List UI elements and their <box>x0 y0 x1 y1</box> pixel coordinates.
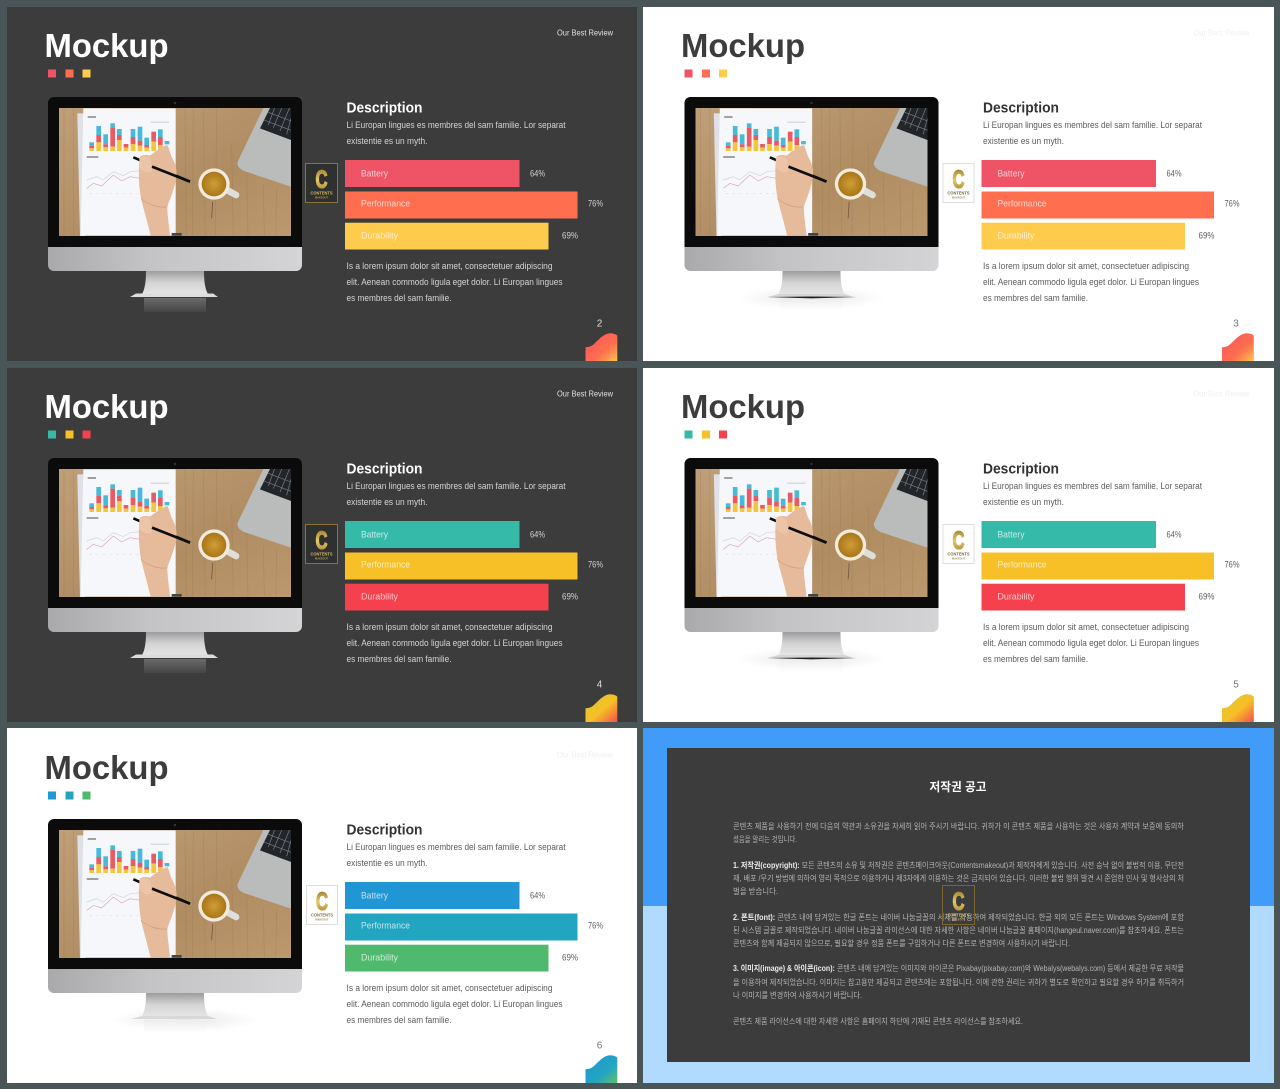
bar chart: 76% <box>588 560 603 570</box>
logo <box>306 524 338 564</box>
panel: copyright notice <box>643 728 1274 1083</box>
notice section: copyright: 재, 배포 /무기 방법에 의하여 영리 목적으로 이용하거나 제3자에게 이용하는 것은 금지되어 있습니다. 이러한 불법 행위 발견 시 준엄한 민사 및 형사상의 처 <box>733 873 1184 883</box>
bar chart: Durability <box>998 591 1035 601</box>
bar chart: 76% <box>1224 560 1240 570</box>
logo: MAKEOUT <box>952 196 965 200</box>
bar chart: Durability <box>998 230 1035 240</box>
logo <box>306 886 338 924</box>
bar chart: 69% <box>562 230 578 240</box>
body text <box>983 622 1199 664</box>
slide 3: light warm <box>643 7 1274 361</box>
intro text: Li Europan lingues es membres del sam familie. Lor separat <box>346 481 566 491</box>
intro text <box>346 120 566 146</box>
body text: es membres del sam familie. <box>346 293 452 303</box>
intro text: existentie es un myth. <box>983 136 1064 146</box>
logo: CONTENTS <box>948 552 970 556</box>
body text <box>346 261 563 303</box>
logo: CONTENTS <box>310 190 332 196</box>
slide 4: dark sun <box>7 368 637 722</box>
bar chart <box>345 882 603 972</box>
logo: MAKEOUT <box>316 918 329 922</box>
body text: es membres del sam familie. <box>346 1015 452 1025</box>
description heading: Description <box>983 462 1059 478</box>
logo: MAKEOUT <box>315 556 328 560</box>
corner shape <box>1222 694 1254 722</box>
page number: 6 <box>597 1040 603 1052</box>
page number: 2 <box>597 318 603 330</box>
body text: es membres del sam familie. <box>983 293 1088 303</box>
bar chart <box>982 521 1240 610</box>
corner shape <box>586 1055 617 1083</box>
notice section: copyright: 1. 저작권(copyright): 모든 콘텐츠의 소유 및 저작권은 콘텐츠메이크아웃(Contentsmakeout)과 제작자에게 있습니다. 사전 승낙 없이 불법적 이용, 무단전 <box>733 860 1184 870</box>
slide background <box>643 368 1274 722</box>
notice section: copyright <box>733 860 1184 896</box>
slide background <box>7 368 637 722</box>
intro text <box>983 481 1202 507</box>
corner shape <box>586 694 617 722</box>
bar chart: Durability <box>361 952 398 962</box>
title: Mockup <box>681 388 805 425</box>
logo: C <box>316 166 328 194</box>
notice intro <box>733 821 1185 844</box>
logo: MAKEOUT <box>952 556 965 560</box>
monitor mockup <box>48 458 302 673</box>
logo: CONTENTS <box>310 552 332 556</box>
logo: C <box>952 166 964 194</box>
header note: Our Best Review <box>1194 28 1250 38</box>
logo: C <box>952 527 964 555</box>
bar chart: Performance <box>998 199 1046 209</box>
title: Mockup <box>44 388 168 425</box>
logo <box>306 164 338 202</box>
notice section: font: 된 시스템 글꼴로 제작되었습니다. 네이버 나눔글꼴 라이선스에 대한 자세한 사항은 네이버 나눔글꼴 홈페이지(hangeul.naver.com)를 참조하세요. 폰트는 <box>733 925 1184 935</box>
notice footer: 콘텐츠 제품 라이선스에 대한 자세한 사항은 홈페이지 하단에 기재된 콘텐츠 라이선스를 참조하세요. <box>733 1016 1023 1026</box>
body text: es membres del sam familie. <box>983 654 1088 664</box>
bar chart: Durability <box>361 591 398 601</box>
monitor mockup <box>48 819 302 1033</box>
slide background <box>643 7 1274 361</box>
logo: C <box>316 888 328 916</box>
page number: 3 <box>1233 318 1239 330</box>
body text: elit. Aenean commodo ligula eget dolor. Li Europan lingues <box>346 638 563 648</box>
logo <box>943 164 974 202</box>
title accent squares <box>48 792 90 800</box>
logo: MAKEOUT <box>315 196 328 200</box>
bar chart: Performance <box>361 199 410 209</box>
title: Mockup <box>44 27 168 64</box>
page number: 4 <box>597 680 603 690</box>
logo: CONTENTS <box>948 912 970 918</box>
description heading: Description <box>346 822 422 838</box>
intro text <box>346 481 566 507</box>
bar chart: 69% <box>1198 591 1214 601</box>
body text <box>983 261 1199 303</box>
intro text: existentie es un myth. <box>346 497 428 507</box>
title accent squares <box>48 70 90 78</box>
bar chart: Performance <box>361 921 410 931</box>
slide 2: dark warm <box>7 7 637 361</box>
slide background <box>7 7 637 361</box>
bar chart: Performance <box>998 560 1046 570</box>
bar chart <box>982 160 1240 250</box>
notice section: images and icons <box>733 963 1184 1000</box>
notice title: 저작권 공고 <box>930 779 986 794</box>
corner shape <box>586 333 617 361</box>
intro text: Li Europan lingues es membres del sam familie. Lor separat <box>346 120 566 130</box>
body text: Is a lorem ipsum dolor sit amet, consectetuer adipiscing <box>983 622 1189 632</box>
intro text: existentie es un myth. <box>346 136 428 146</box>
bar chart: 76% <box>588 921 603 931</box>
body text: elit. Aenean commodo ligula eget dolor. Li Europan lingues <box>346 277 563 287</box>
logo: C <box>952 888 964 916</box>
bar chart: 69% <box>562 952 578 962</box>
logo: CONTENTS <box>948 190 970 196</box>
logo: C <box>316 527 328 555</box>
intro text <box>983 120 1202 146</box>
header note: Our Best Review <box>1194 390 1250 398</box>
body text: es membres del sam familie. <box>346 654 452 664</box>
bar chart: 76% <box>588 199 603 209</box>
body text: Is a lorem ipsum dolor sit amet, consectetuer adipiscing <box>346 261 552 271</box>
logo: MAKEOUT <box>952 918 965 922</box>
notice section: images and icons: 을 이용하여 제작되었습니다. 이미지는 참고용만 제공되고 콘텐츠에는 포함됩니다. 이에 관한 권리는 귀하가 별도로 확인하고 필요할 경우 허가를 취득하거 <box>733 977 1184 987</box>
bar chart: 64% <box>530 890 545 900</box>
intro text: existentie es un myth. <box>346 858 428 868</box>
notice section: font: 2. 폰트(font): 콘텐츠 내에 담겨있는 한글 폰트는 네이버 나눔글꼴의 서체를 사용하여 제작되었습니다. 한글 외의 모든 폰트는 Windows System에 포함 <box>733 912 1185 922</box>
notice dark card <box>667 748 1250 1062</box>
description heading: Description <box>346 462 422 478</box>
notice section: copyright: 벌을 받습니다. <box>733 886 778 896</box>
notice section: images and icons: 나 이미지를 변경하여 사용하시기 바랍니다. <box>733 990 862 1000</box>
title accent squares <box>48 430 90 438</box>
bar chart: Battery <box>361 168 388 178</box>
bar chart: 64% <box>530 529 545 539</box>
intro text: Li Europan lingues es membres del sam familie. Lor separat <box>346 842 566 852</box>
body text: elit. Aenean commodo ligula eget dolor. Li Europan lingues <box>346 999 563 1009</box>
body text: Is a lorem ipsum dolor sit amet, consectetuer adipiscing <box>346 983 552 993</box>
intro text: Li Europan lingues es membres del sam familie. Lor separat <box>983 481 1202 491</box>
title: Mockup <box>681 27 805 64</box>
notice blue background <box>643 728 1274 1083</box>
slide 6: light sea <box>7 728 637 1083</box>
corner shape <box>1222 333 1254 361</box>
bar chart: Battery <box>998 529 1025 539</box>
slide background <box>7 728 637 1083</box>
logo <box>943 524 974 564</box>
title accent squares <box>684 430 727 438</box>
notice section: images and icons: 3. 이미지(image) & 아이콘(icon): 콘텐츠 내에 담겨있는 이미지와 아이콘은 Pixabay(pixabay.com)와 Webalys(webalys.com) 등에서 제공한 무료 저작물 <box>733 963 1184 973</box>
bar chart: 64% <box>1166 168 1182 178</box>
body text: Is a lorem ipsum dolor sit amet, consectetuer adipiscing <box>983 261 1189 271</box>
header note: Our Best Review <box>557 390 613 398</box>
title: Mockup <box>44 749 168 786</box>
logo: CONTENTS <box>311 912 333 918</box>
bar chart: Performance <box>361 560 410 570</box>
monitor mockup <box>684 97 938 311</box>
notice section: font <box>733 912 1185 948</box>
bar chart: Battery <box>998 168 1025 178</box>
body text: elit. Aenean commodo ligula eget dolor. Li Europan lingues <box>983 277 1199 287</box>
bar chart: Battery <box>361 529 388 539</box>
body text: elit. Aenean commodo ligula eget dolor. Li Europan lingues <box>983 638 1199 648</box>
body text: Is a lorem ipsum dolor sit amet, consectetuer adipiscing <box>346 622 552 632</box>
notice section: font: 콘텐츠와 함께 제공되지 않으므로, 필요할 경우 정품 폰트를 구입하거나 다른 폰트로 변경하여 사용하시기 바랍니다. <box>733 938 1070 948</box>
bar chart: 76% <box>1224 199 1240 209</box>
bar chart: Battery <box>361 890 388 900</box>
intro text: Li Europan lingues es membres del sam familie. Lor separat <box>983 120 1202 130</box>
body text <box>346 622 563 664</box>
notice intro: 셨음을 알리는 것입니다. <box>733 834 797 844</box>
notice intro: 콘텐츠 제품을 사용하기 전에 다음의 약관과 소유권을 자세히 읽어 주시기 바랍니다. 귀하가 이 콘텐츠 제품을 사용하는 것은 사용자 계약과 보증에 동의하 <box>733 821 1185 831</box>
logo <box>942 886 974 924</box>
slide 5: light sun <box>643 368 1274 722</box>
bar chart: 64% <box>1166 529 1182 539</box>
bar chart: 69% <box>1198 230 1214 240</box>
intro text <box>346 842 566 868</box>
description heading: Description <box>983 100 1059 116</box>
body text <box>346 983 563 1025</box>
monitor mockup <box>48 97 302 312</box>
bar chart: Durability <box>361 230 398 240</box>
monitor mockup <box>684 458 938 672</box>
intro text: existentie es un myth. <box>983 497 1064 507</box>
bar chart: 69% <box>562 591 578 601</box>
title accent squares <box>684 70 727 78</box>
bar chart <box>345 521 603 610</box>
description heading: Description <box>346 100 422 116</box>
bar chart <box>345 160 603 250</box>
bar chart: 64% <box>530 168 545 178</box>
header note: Our Best Review <box>557 28 613 38</box>
page number: 5 <box>1233 680 1239 690</box>
header note: Our Best Review <box>557 750 613 760</box>
